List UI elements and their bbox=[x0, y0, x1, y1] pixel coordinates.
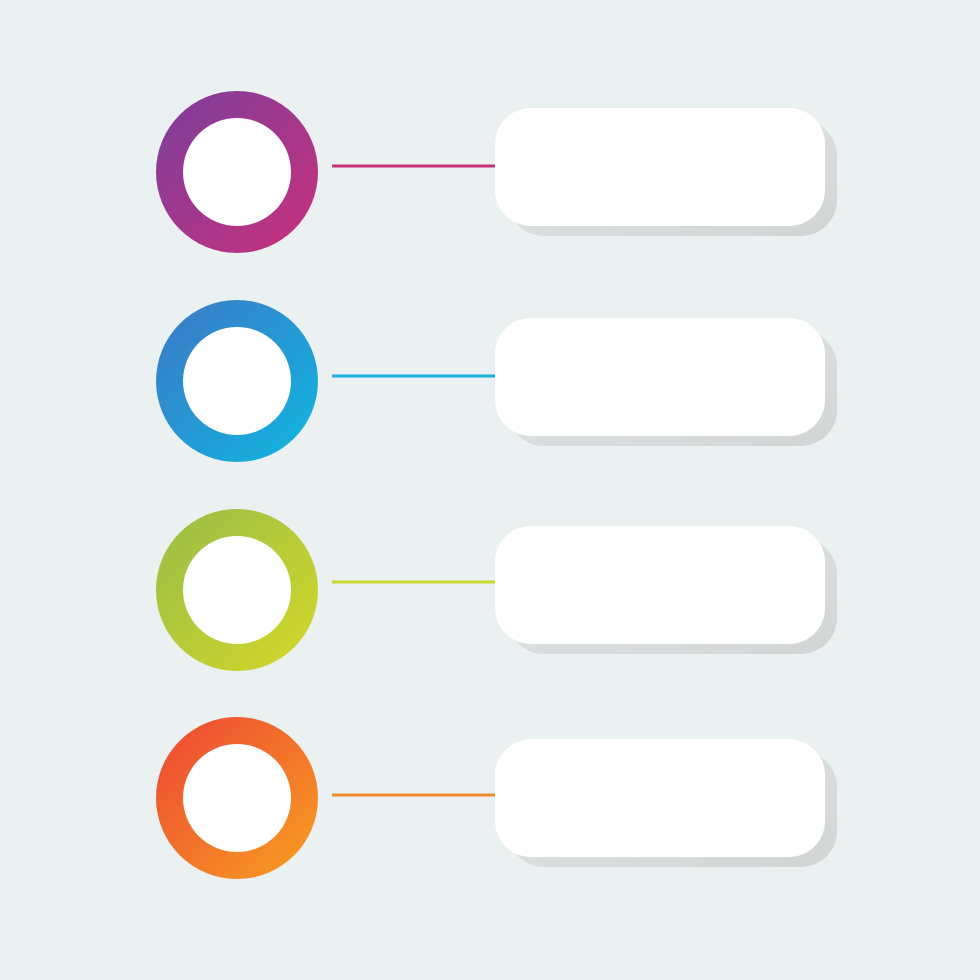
ring 1 bbox=[156, 91, 318, 253]
box 1 bbox=[495, 108, 837, 236]
box 2 bbox=[495, 318, 837, 446]
connector 1 bbox=[332, 164, 496, 168]
row 2 bbox=[156, 300, 837, 462]
box 3 bbox=[495, 526, 837, 654]
ring 4 bbox=[156, 717, 318, 879]
connector 2 bbox=[332, 374, 496, 378]
ring 3 bbox=[156, 509, 318, 671]
box 4 bbox=[495, 739, 837, 867]
row 1 bbox=[156, 91, 837, 253]
row 3 bbox=[156, 509, 837, 671]
ring 2 bbox=[156, 300, 318, 462]
connector 3 bbox=[332, 580, 496, 584]
row 4 bbox=[156, 717, 837, 879]
connector 4 bbox=[332, 794, 496, 796]
